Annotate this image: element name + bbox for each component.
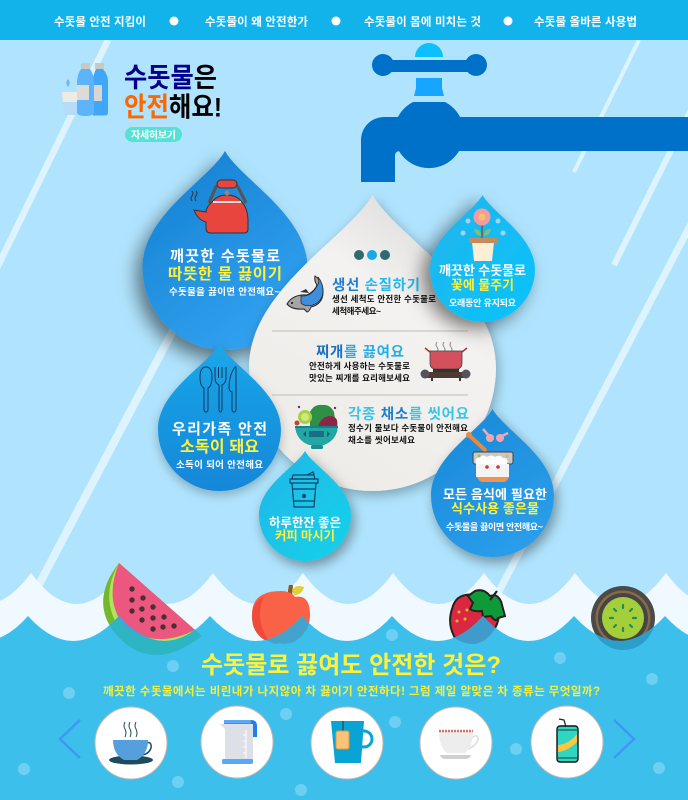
navigation bar	[0, 0, 688, 40]
stew text block	[309, 344, 410, 383]
panel: central white drop	[249, 195, 496, 491]
fish text block: 세척해주세요~	[332, 306, 381, 316]
icon: pot on stove	[420, 342, 470, 381]
icon: fish	[287, 276, 323, 312]
pagination dots	[354, 250, 390, 260]
flower drop text: 꽃에 물주기	[451, 278, 514, 292]
title	[124, 63, 222, 122]
cutlery drop text: 소독이 되어 안전해요	[176, 459, 263, 471]
icon: takeaway cup	[290, 472, 318, 507]
button: details: 자세히보기	[131, 128, 176, 142]
fish text block	[332, 277, 436, 316]
button: details	[125, 127, 182, 142]
flower drop text	[439, 263, 526, 308]
icon: coffee cup circle	[420, 707, 492, 779]
stew text block: 찌개를 끓여요	[316, 344, 404, 361]
food drop text: 식수사용 좋은물	[451, 501, 539, 516]
icon: red kettle	[191, 180, 248, 233]
icon: strawberry	[450, 590, 505, 644]
stew text block: 안전하게 사용하는 수돗물로	[309, 361, 410, 371]
kettle drop text: 따뜻한 물 끓이기	[168, 265, 282, 283]
flower drop text: 오래동안 유지되요	[449, 297, 516, 308]
flower drop text: 깨끗한 수돗물로	[439, 263, 526, 278]
cutlery drop text: 우리가족 안전	[172, 421, 267, 438]
panel: kettle drop	[142, 151, 308, 350]
food drop text	[443, 487, 547, 532]
kettle drop text	[168, 248, 282, 298]
icon: kiwi	[591, 586, 655, 650]
icon: cooking pot	[466, 429, 513, 482]
arrow: next	[614, 720, 634, 758]
icon: tea bag mug circle	[311, 707, 383, 779]
bottom subheading: 깨끗한 수돗물에서는 비린내가 나지않아 차 끓이기 안전하다! 그럼 제일 알맞은 차 종류는 무엇일까?	[103, 684, 600, 698]
navigation bar: 수돗물이 몸에 미치는 것	[364, 14, 481, 28]
cutlery drop text: 소독이 돼요	[180, 438, 259, 456]
coffee drop text	[269, 515, 341, 543]
blue wave	[0, 616, 688, 800]
navigation bar: 수돗물 올바른 사용법	[534, 16, 637, 28]
cutlery drop text	[172, 421, 267, 471]
food drop text: 수돗물을 끓이면 안전해요~	[446, 521, 543, 532]
icon: apple	[252, 585, 310, 644]
fruit row	[103, 563, 655, 655]
coffee drop text: 하루한잔 좋은	[269, 515, 341, 530]
submerged fruit tint	[110, 616, 654, 655]
kettle drop text: 깨끗한 수돗물로	[170, 248, 280, 265]
vegetable text block	[348, 406, 469, 445]
vegetable text block: 각종 채소를 씻어요	[348, 406, 469, 423]
water bubbles	[18, 629, 665, 796]
arrow: previous	[60, 720, 80, 758]
faucet illustration	[361, 43, 688, 182]
icon: electric kettle circle	[201, 706, 273, 778]
icon: salad bowl	[294, 405, 338, 449]
food drop text: 모든 음식에 필요한	[443, 487, 547, 502]
vegetable text block: 정수기 물보다 수돗물이 안전해요	[348, 423, 468, 433]
white wave	[0, 573, 688, 800]
fish text block: 생선 손질하기	[332, 277, 420, 294]
icon: flower pot	[460, 208, 506, 261]
fish text block: 생선 세척도 안전한 수돗물로	[332, 294, 436, 304]
panel: flower drop	[430, 195, 535, 322]
icon: spoon, fork, knife	[200, 367, 236, 412]
icon: soda can circle	[531, 706, 603, 778]
kettle drop text: 수돗물을 끓이면 안전해요~	[169, 286, 280, 298]
title: 안전해요!	[124, 92, 222, 122]
icon: watermelon	[103, 563, 202, 655]
panel: food drop	[431, 409, 554, 557]
icon: water bottles and glass	[62, 63, 108, 116]
panel: coffee drop	[259, 451, 351, 561]
navigation bar: 수돗물 안전 지킴이	[54, 16, 146, 28]
coffee drop text: 커피 마시기	[275, 528, 335, 543]
title: 수돗물은	[124, 63, 217, 93]
navigation bar: 수돗물이 왜 안전한가	[205, 14, 308, 28]
icon: tea cup circle	[95, 707, 167, 779]
bottom heading: 수돗물로 끓여도 안전한 것은?	[201, 652, 501, 679]
stew text block: 맛있는 찌개를 요리해보세요	[309, 373, 410, 383]
vegetable text block: 채소를 씻어보세요	[348, 435, 415, 445]
panel: cutlery drop	[158, 344, 281, 491]
